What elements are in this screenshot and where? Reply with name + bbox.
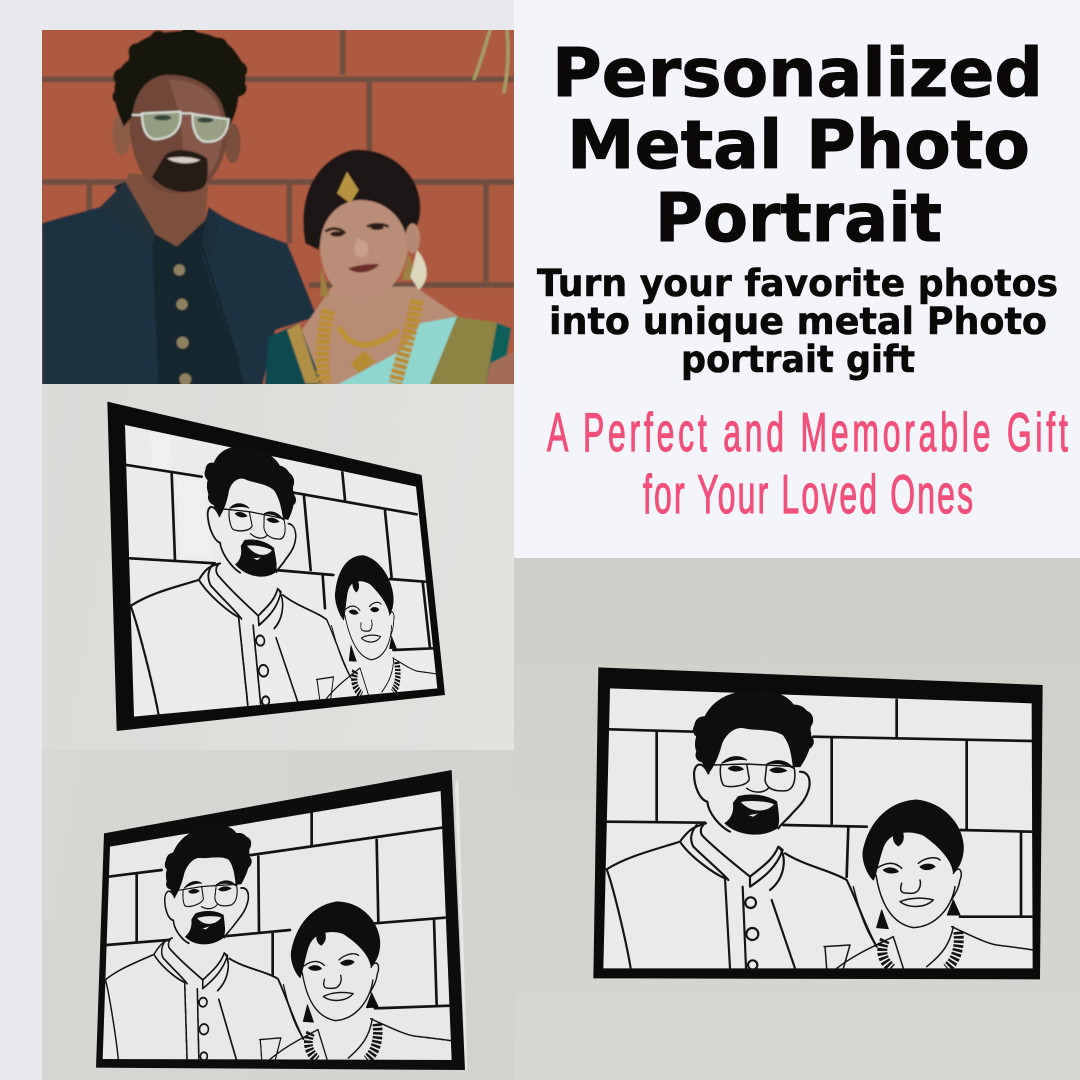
man figure in photo	[42, 27, 317, 387]
frame bar	[107, 402, 445, 731]
pink tagline: A Perfect and Memorable Gift	[547, 401, 1068, 463]
pink tagline	[547, 401, 1068, 525]
pink tagline: for Your Loved Ones	[643, 463, 973, 525]
portrait art	[105, 826, 451, 1060]
brick lines	[127, 465, 433, 650]
woman figure in photo	[265, 150, 514, 387]
subtitle	[537, 262, 1058, 381]
subtitle: portrait gift	[681, 338, 915, 381]
brick lines	[607, 700, 1032, 917]
title: Metal Photo	[567, 106, 1030, 184]
panel: angled frame left view	[42, 384, 514, 750]
frame bar	[96, 770, 465, 1070]
panel: straight-on frame view	[514, 558, 1080, 1080]
panel: original couple photo	[42, 30, 514, 384]
title: Portrait	[655, 179, 942, 257]
title	[552, 34, 1043, 257]
portrait art	[606, 692, 1034, 972]
title: Personalized	[552, 34, 1043, 112]
subtitle: Turn your favorite photos	[537, 262, 1058, 305]
frame bar	[593, 667, 1043, 979]
brick lines	[107, 812, 450, 1008]
panel: heading and tagline	[514, 0, 1080, 558]
portrait art	[130, 448, 437, 716]
subtitle: into unique metal Photo	[549, 300, 1047, 343]
panel: angled frame right view	[42, 750, 514, 1080]
